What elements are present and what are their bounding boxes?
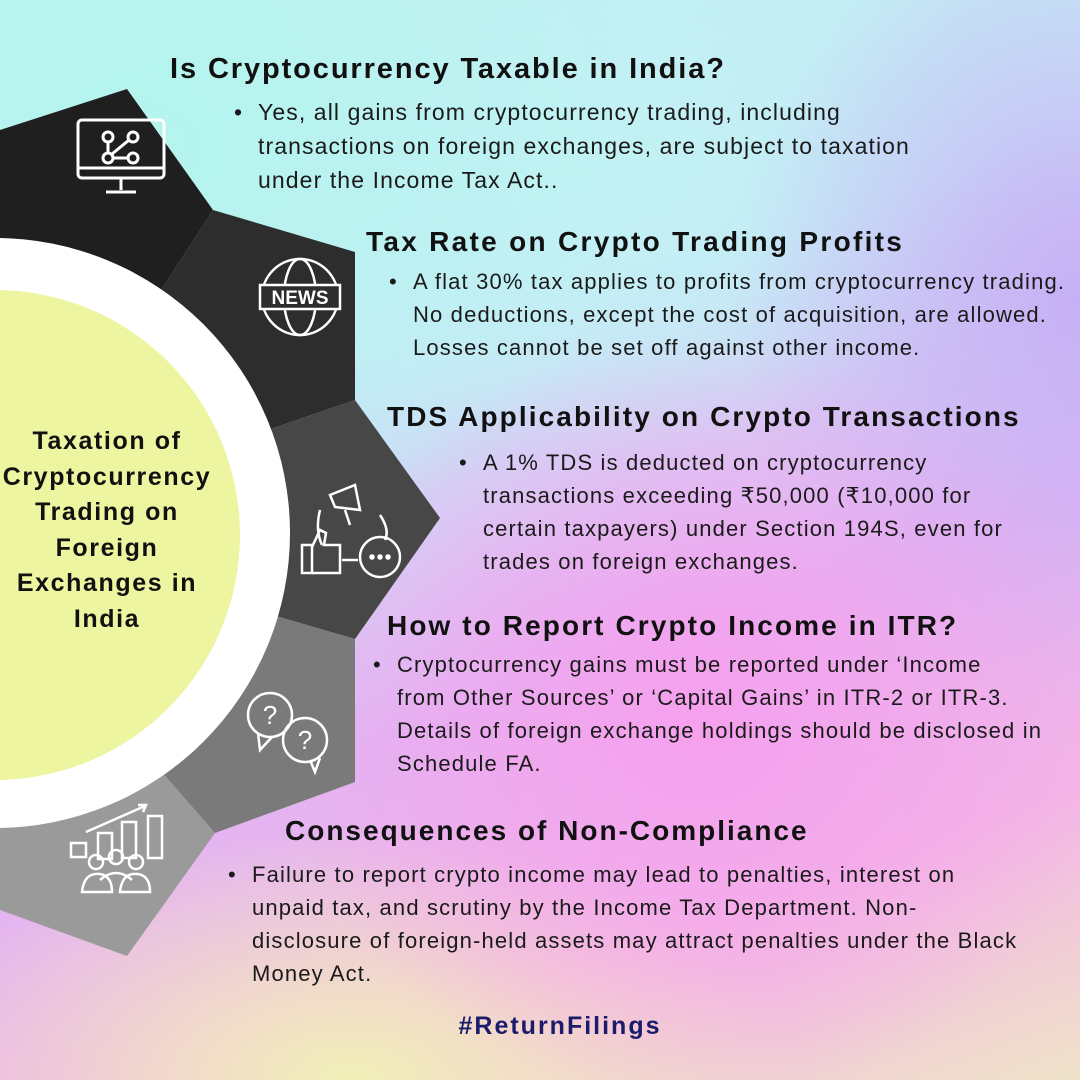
text 3: certain taxpayers) under Section 194S, even for [483,516,1003,541]
text 1: under the Income Tax Act.. [258,167,559,193]
icon: chart people [71,805,162,892]
center title: Taxation of [32,427,182,455]
segment 2 [160,210,355,432]
segment 5 [0,770,215,956]
center title: India [74,604,140,632]
segment 3 [262,400,440,639]
icon: megaphone feedback [302,485,400,577]
text 5: Failure to report crypto income may lead to penalties, interest on [252,862,955,887]
text 1: Yes, all gains from cryptocurrency trading, including [258,99,841,125]
heading 3: TDS Applicability on Crypto Transactions [387,401,1021,432]
text 1: transactions on foreign exchanges, are subject to taxation [258,133,910,159]
footer hashtag: #ReturnFilings [458,1012,662,1040]
center title: Exchanges in [17,569,197,597]
text 3: A 1% TDS is deducted on cryptocurrency [483,450,927,475]
text 5: unpaid tax, and scrutiny by the Income Tax Department. Non- [252,895,917,920]
text 2 [413,265,1065,364]
icon: news globe: NEWS [272,288,328,309]
text 4: Schedule FA. [397,751,542,776]
icon: question bubbles [248,693,327,772]
center title: Trading on [35,498,179,526]
heading 1: Is Cryptocurrency Taxable in India? [170,53,726,85]
heading 4: How to Report Crypto Income in ITR? [387,610,958,641]
segment 1 [0,89,213,292]
heading 5: Consequences of Non-Compliance [285,815,809,846]
yellow center [0,290,240,780]
text 2: A flat 30% tax applies to profits from cryptocurrency trading. [413,269,1065,294]
center title: Foreign [56,534,158,562]
text 3: transactions exceeding ₹50,000 (₹10,000 for [483,483,971,508]
white ring [0,238,290,828]
text 3: trades on foreign exchanges. [483,549,799,574]
icon: news globe [260,259,340,335]
segment 4 [160,612,355,833]
icon: question bubbles: ? [263,700,277,730]
text 3 [483,446,1003,578]
icon: question bubbles: ? [298,725,312,755]
text 5 [252,858,1017,990]
heading 2: Tax Rate on Crypto Trading Profits [366,226,904,257]
center title [3,427,211,632]
text 4: from Other Sources’ or ‘Capital Gains’ in ITR-2 or ITR-3. [397,685,1009,710]
text 4 [397,648,1042,780]
icon: monitor [78,120,164,192]
text 2: No deductions, except the cost of acquisition, are allowed. [413,302,1047,327]
text 1 [258,95,910,197]
center title: Cryptocurrency [3,462,211,490]
text 4: Cryptocurrency gains must be reported under ‘Income [397,652,981,677]
text 5: disclosure of foreign-held assets may attract penalties under the Black [252,928,1017,953]
text 5: Money Act. [252,961,372,986]
text 2: Losses cannot be set off against other income. [413,335,920,360]
text 4: Details of foreign exchange holdings should be disclosed in [397,718,1042,743]
